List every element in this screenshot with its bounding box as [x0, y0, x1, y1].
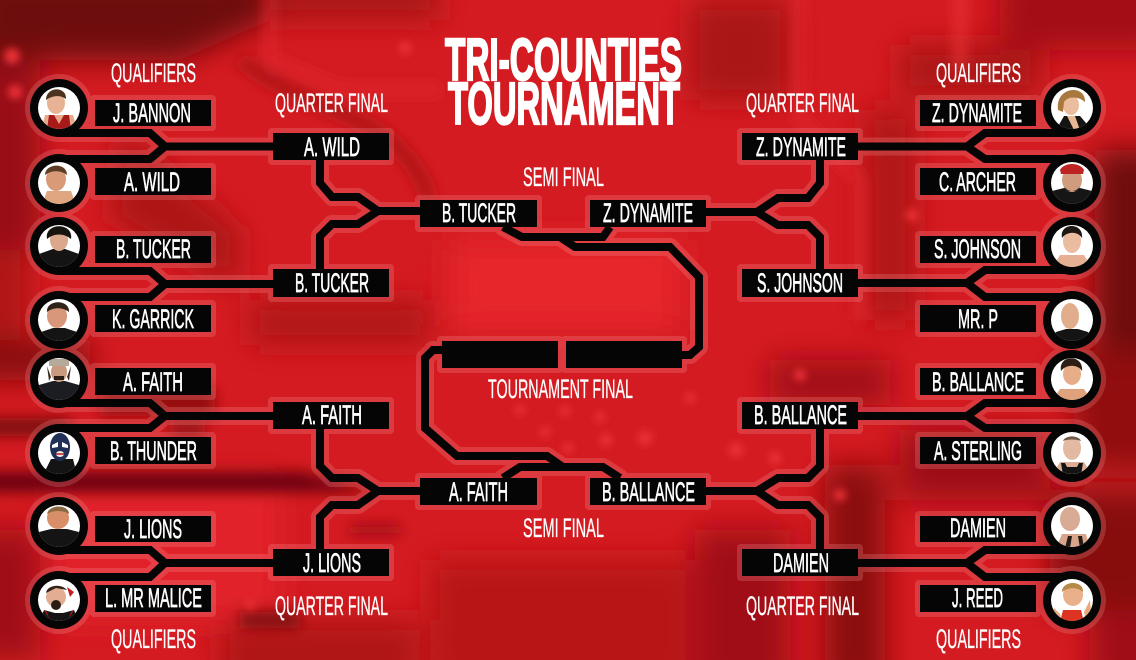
- QF: S. Johnson: S. JOHNSON: [757, 268, 843, 298]
- SF: A. Faith: A. FAITH: [449, 477, 508, 507]
- name: Z. Dynamite: Z. DYNAMITE: [932, 98, 1022, 128]
- bracket connector lines: [59, 133, 1072, 577]
- QF: A. Wild: [273, 132, 389, 162]
- round headings: centre: SEMI FINAL: [523, 513, 604, 543]
- SF: B. Ballance: B. BALLANCE: [602, 477, 695, 507]
- round headings: left: QUALIFIERS: [111, 624, 196, 654]
- portrait: B. Tucker: [30, 217, 88, 275]
- round headings: left: QUARTER FINAL: [275, 88, 388, 118]
- portrait: Z. Dynamite: [1043, 79, 1101, 137]
- title: [445, 27, 682, 137]
- name: Z. Dynamite: [920, 98, 1036, 128]
- name: C. Archer: [920, 167, 1036, 197]
- SF: Z. Dynamite: Z. DYNAMITE: [603, 198, 693, 228]
- name: A. Faith: A. FAITH: [123, 367, 183, 397]
- name: J. Bannon: [95, 98, 211, 128]
- round headings: centre: TOURNAMENT FINAL: [488, 374, 633, 404]
- title: TOURNAMENT: [448, 71, 680, 137]
- round headings: right: QUARTER FINAL: [746, 591, 859, 621]
- name: A. Wild: [95, 167, 211, 197]
- QF: B. Ballance: [742, 400, 858, 430]
- round headings: right: QUALIFIERS: [936, 624, 1021, 654]
- round headings: centre: [488, 162, 633, 543]
- QF: A. Wild: A. WILD: [304, 132, 360, 162]
- QF: Damien: [742, 548, 858, 578]
- name: A. Sterling: [920, 436, 1036, 466]
- portrait: Mr. P: [1043, 291, 1101, 349]
- quarter final boxes: [273, 132, 858, 578]
- portrait: J. Lions: [30, 497, 88, 555]
- name: J. Reed: J. REED: [952, 583, 1003, 613]
- name: A. Sterling: A. STERLING: [934, 436, 1022, 466]
- QF: B. Tucker: [273, 268, 389, 298]
- QF: B. Tucker: B. TUCKER: [295, 268, 369, 298]
- portrait: L. Mr Malice: [30, 571, 88, 629]
- name: K. Garrick: K. GARRICK: [112, 304, 194, 334]
- name: K. Garrick: [95, 304, 211, 334]
- name: A. Faith: [95, 367, 211, 397]
- name: L. Mr Malice: L. MR MALICE: [105, 583, 202, 613]
- SF: B. Ballance: [590, 477, 706, 507]
- name: B. Tucker: [95, 234, 211, 264]
- portrait: J. Bannon: [30, 79, 88, 137]
- round headings: right: QUARTER FINAL: [746, 88, 859, 118]
- round headings: centre: SEMI FINAL: [523, 162, 604, 192]
- title: TRI-COUNTIES: [445, 27, 682, 93]
- left qualifiers panel: [95, 98, 211, 613]
- QF: S. Johnson: [742, 268, 858, 298]
- SF: B. Tucker: B. TUCKER: [442, 198, 516, 228]
- portrait: Damien: [1043, 497, 1101, 555]
- QF: Z. Dynamite: Z. DYNAMITE: [756, 132, 846, 162]
- portrait: A. Wild: [30, 154, 88, 212]
- portrait: K. Garrick: [30, 291, 88, 349]
- name: Damien: [920, 513, 1036, 543]
- QF: J. Lions: [273, 548, 389, 578]
- portrait: C. Archer: [1043, 154, 1101, 212]
- right qualifiers panel: [920, 98, 1036, 613]
- QF: Z. Dynamite: [742, 132, 858, 162]
- name: B. Tucker: B. TUCKER: [116, 234, 191, 264]
- round headings: right: QUALIFIERS: [936, 58, 1021, 88]
- portrait: B. Thunder: [30, 424, 88, 482]
- name: J. Lions: J. LIONS: [124, 514, 182, 544]
- name: J. Bannon: J. BANNON: [113, 98, 191, 128]
- portrait: B. Ballance: [1043, 350, 1101, 408]
- name: J. Lions: [95, 514, 211, 544]
- QF: A. Faith: [273, 400, 389, 430]
- portrait: S. Johnson: [1043, 217, 1101, 275]
- name: B. Ballance: B. BALLANCE: [932, 367, 1024, 397]
- semi final boxes: [420, 198, 706, 507]
- name: Damien: DAMIEN: [950, 513, 1006, 543]
- portrait: J. Reed: [1043, 571, 1101, 629]
- name: J. Reed: [920, 583, 1036, 613]
- QF: J. Lions: J. LIONS: [303, 548, 361, 578]
- tournament final empty boxes: [442, 341, 682, 368]
- name: A. Wild: A. WILD: [124, 167, 180, 197]
- name: B. Ballance: [920, 367, 1036, 397]
- SF: B. Tucker: [420, 198, 537, 228]
- name: B. Thunder: B. THUNDER: [110, 436, 197, 466]
- name: Mr. P: MR. P: [958, 304, 998, 334]
- round headings: right: [746, 58, 1021, 654]
- SF: A. Faith: [420, 477, 537, 507]
- round headings: left: QUARTER FINAL: [275, 591, 388, 621]
- QF: B. Ballance: B. BALLANCE: [754, 400, 847, 430]
- round headings: left: [111, 58, 388, 654]
- name: C. Archer: C. ARCHER: [939, 167, 1016, 197]
- name: L. Mr Malice: [95, 583, 211, 613]
- QF: A. Faith: A. FAITH: [302, 400, 362, 430]
- portrait: A. Faith: [30, 350, 88, 408]
- round headings: left: QUALIFIERS: [111, 58, 196, 88]
- name: S. Johnson: [920, 234, 1036, 264]
- SF: Z. Dynamite: [590, 198, 706, 228]
- name: Mr. P: [920, 304, 1036, 334]
- name: S. Johnson: S. JOHNSON: [934, 234, 1021, 264]
- name: B. Thunder: [95, 436, 211, 466]
- portrait: A. Sterling: [1043, 424, 1101, 482]
- QF: Damien: DAMIEN: [773, 548, 829, 578]
